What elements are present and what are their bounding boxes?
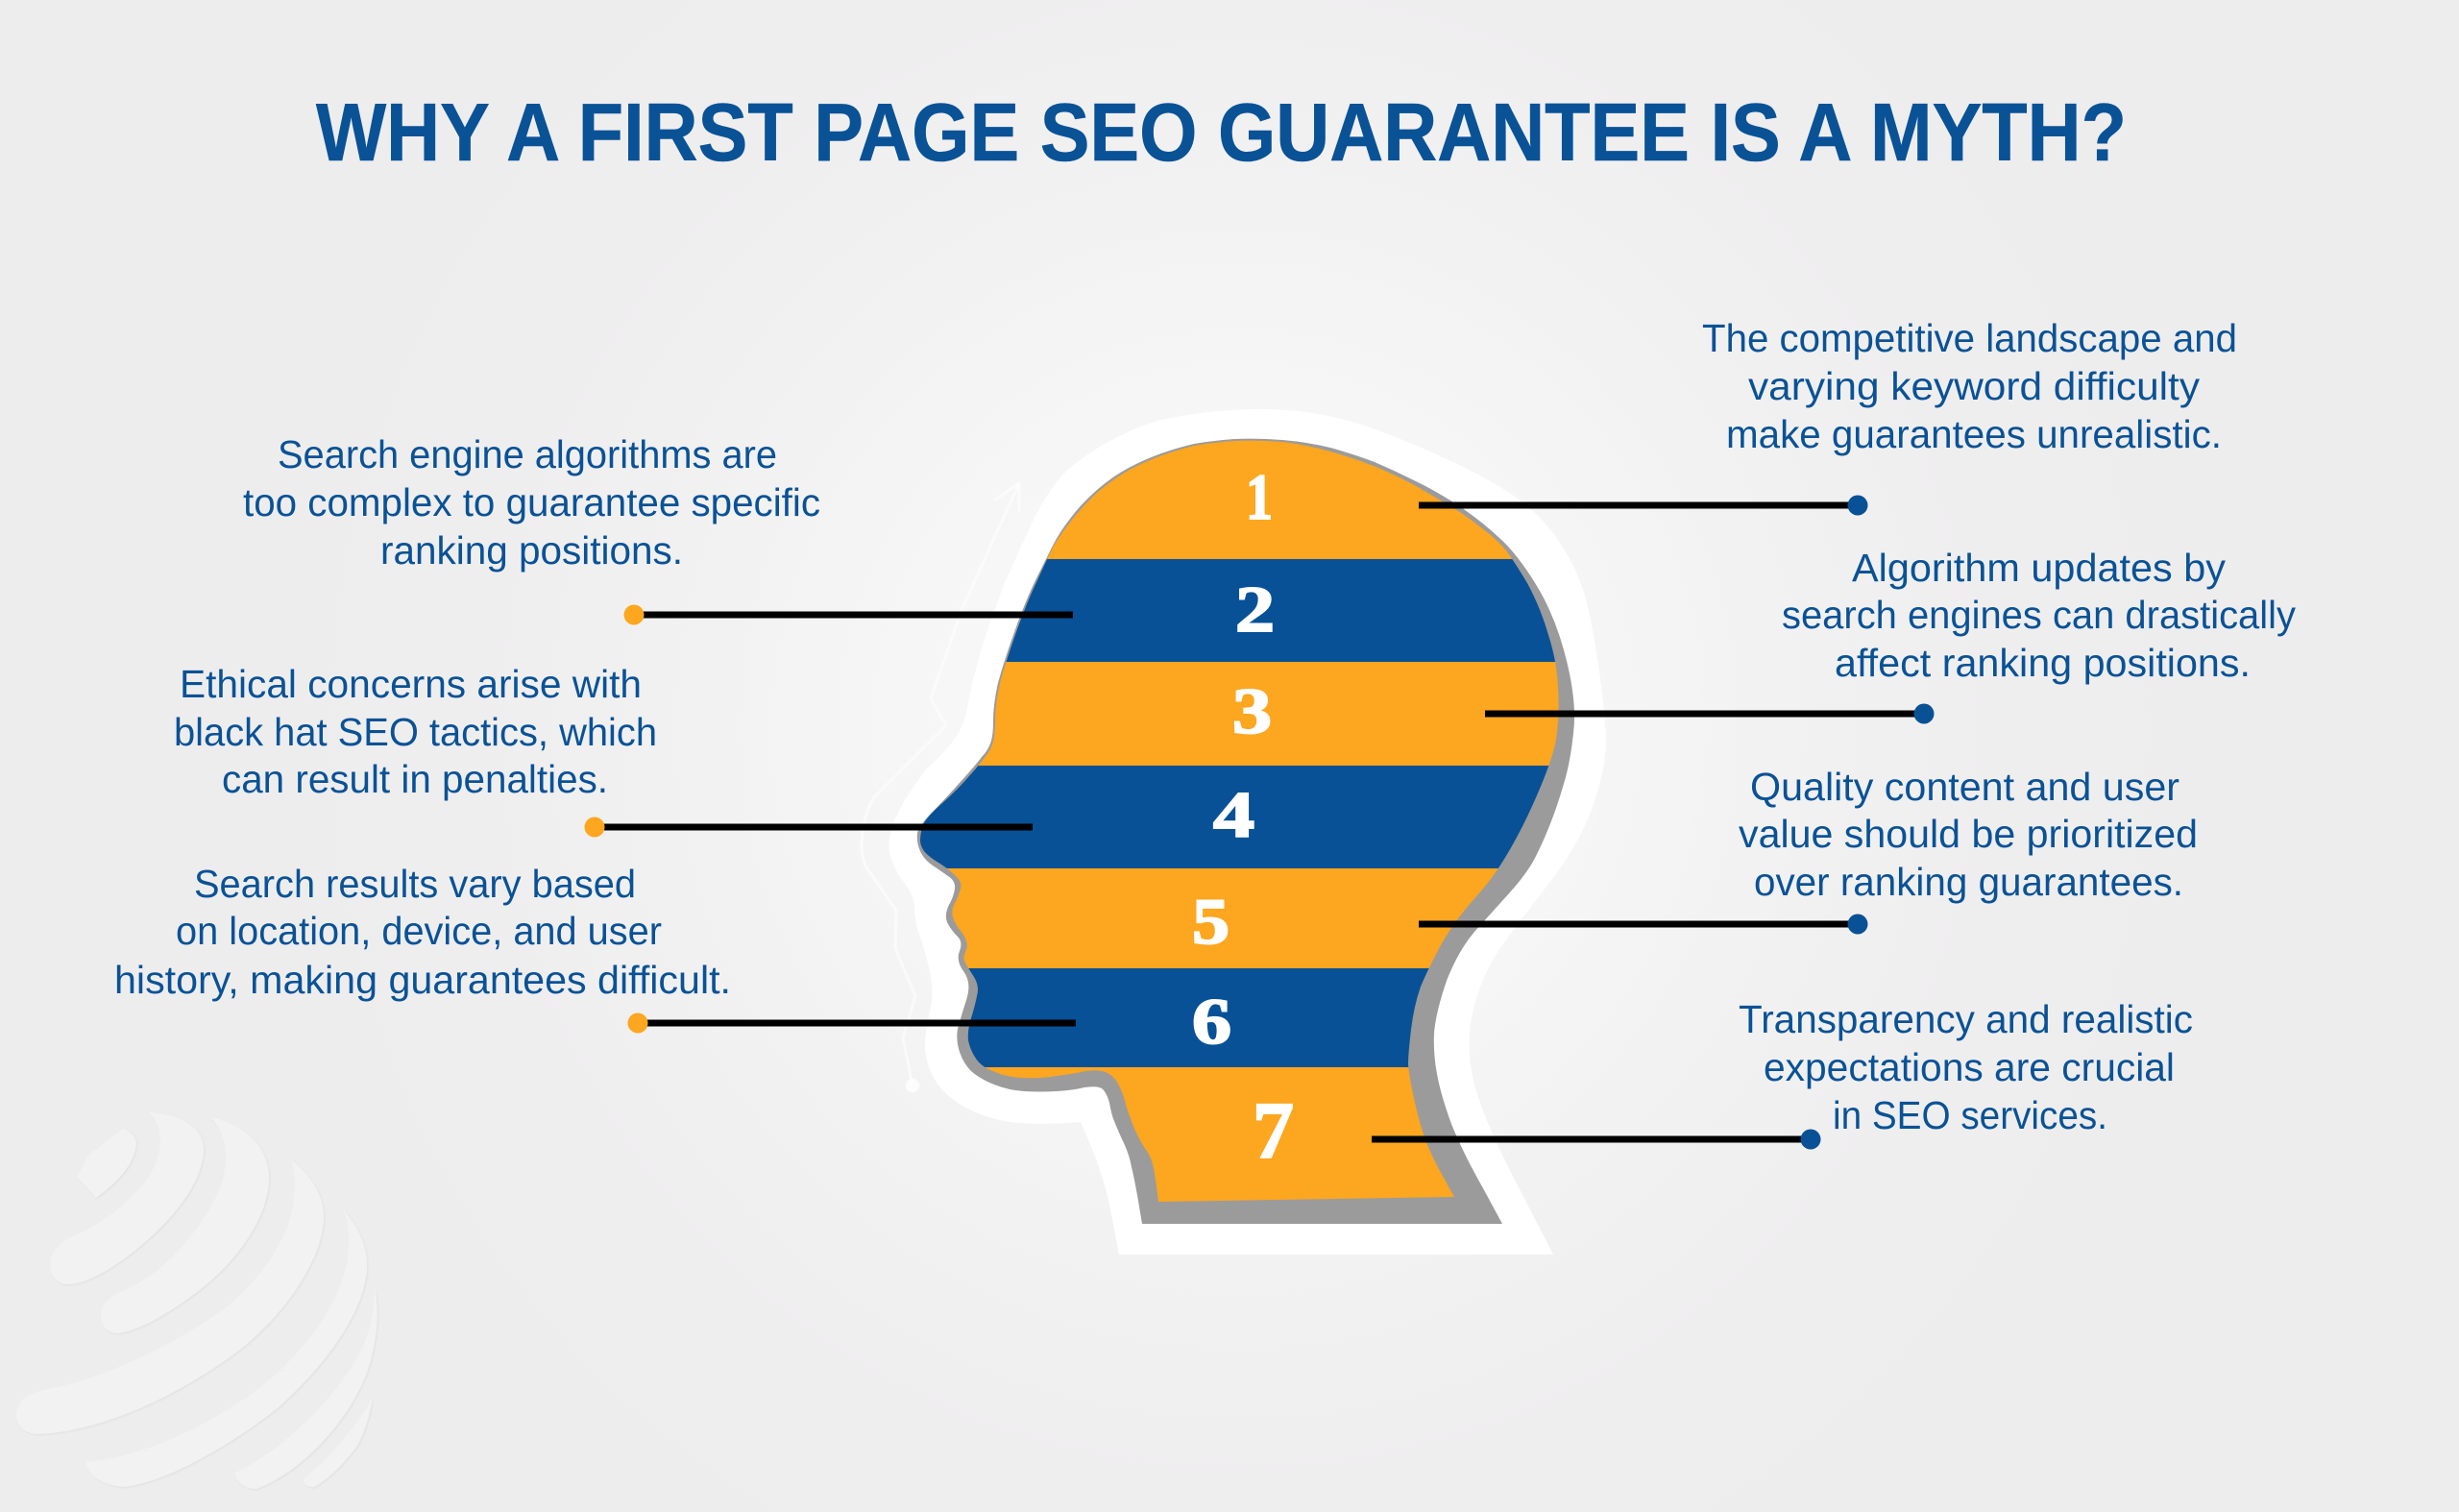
numbers [1192,460,1294,1176]
text: search results: on location, device, and user [176,909,662,953]
number 2: 2 [1235,573,1275,646]
text: competitive landscape: make guarantees unrealistic. [1726,412,2222,456]
title: WHY A FIRST PAGE SEO GUARANTEE IS A MYTH? [316,87,2127,179]
text: quality content: Quality content and user [1750,765,2179,809]
connector right 3 [1485,703,1935,724]
text: search results: Search results vary based [194,862,636,906]
connector right 5 [1419,915,1867,934]
text: search engine algorithms: ranking positions. [380,528,683,573]
text: algorithm updates: affect ranking positions. [1835,641,2251,685]
text: competitive landscape: varying keyword difficulty [1748,364,2201,408]
number 3: 3 [1232,674,1272,747]
number 1: 1 [1246,460,1273,533]
text: transparency: expectations are crucial [1764,1045,2175,1089]
connector right 1 [1419,496,1867,515]
head grey outline [917,439,1574,1224]
text: search results: history, making guarantees difficult. [114,958,731,1002]
number 5: 5 [1192,885,1230,958]
text: transparency: in SEO services. [1833,1093,2107,1137]
connector right 7 [1372,1130,1821,1149]
text: ethical concerns [174,662,657,801]
text: search engine algorithms [243,432,820,573]
head figure [864,409,1633,1255]
text: search engine algorithms: Search engine algorithms are [278,432,777,476]
text: algorithm updates [1782,546,2296,685]
text: transparency [1739,997,2193,1137]
connector left 4 [584,817,1033,838]
text: algorithm updates: search engines can drastically [1782,593,2296,637]
head white outline [889,409,1606,1255]
text: search engine algorithms: too complex to guarantee specific [243,480,820,524]
text: ethical concerns: black hat SEO tactics, which [174,710,657,754]
text: quality content: over ranking guarantees. [1754,860,2183,904]
connector left 6 [628,1012,1076,1034]
text: ethical concerns: Ethical concerns arise with [180,662,642,706]
number 6: 6 [1192,985,1231,1058]
text: competitive landscape [1702,316,2237,456]
text: algorithm updates: Algorithm updates by [1852,546,2227,590]
number 4: 4 [1213,778,1254,851]
connector left 2 [624,605,1073,624]
text: competitive landscape: The competitive landscape and [1702,316,2237,360]
head colour stripes [920,440,1559,1202]
text: quality content: value should be prioritized [1739,812,2198,856]
watermark: globe [16,1112,377,1489]
text: search results [114,862,731,1002]
text: ethical concerns: can result in penalties. [222,757,608,801]
decorative arrow behind head [862,483,1019,1091]
number 7: 7 [1253,1086,1294,1176]
text: transparency: Transparency and realistic [1739,997,2193,1041]
text: quality content [1739,765,2198,904]
